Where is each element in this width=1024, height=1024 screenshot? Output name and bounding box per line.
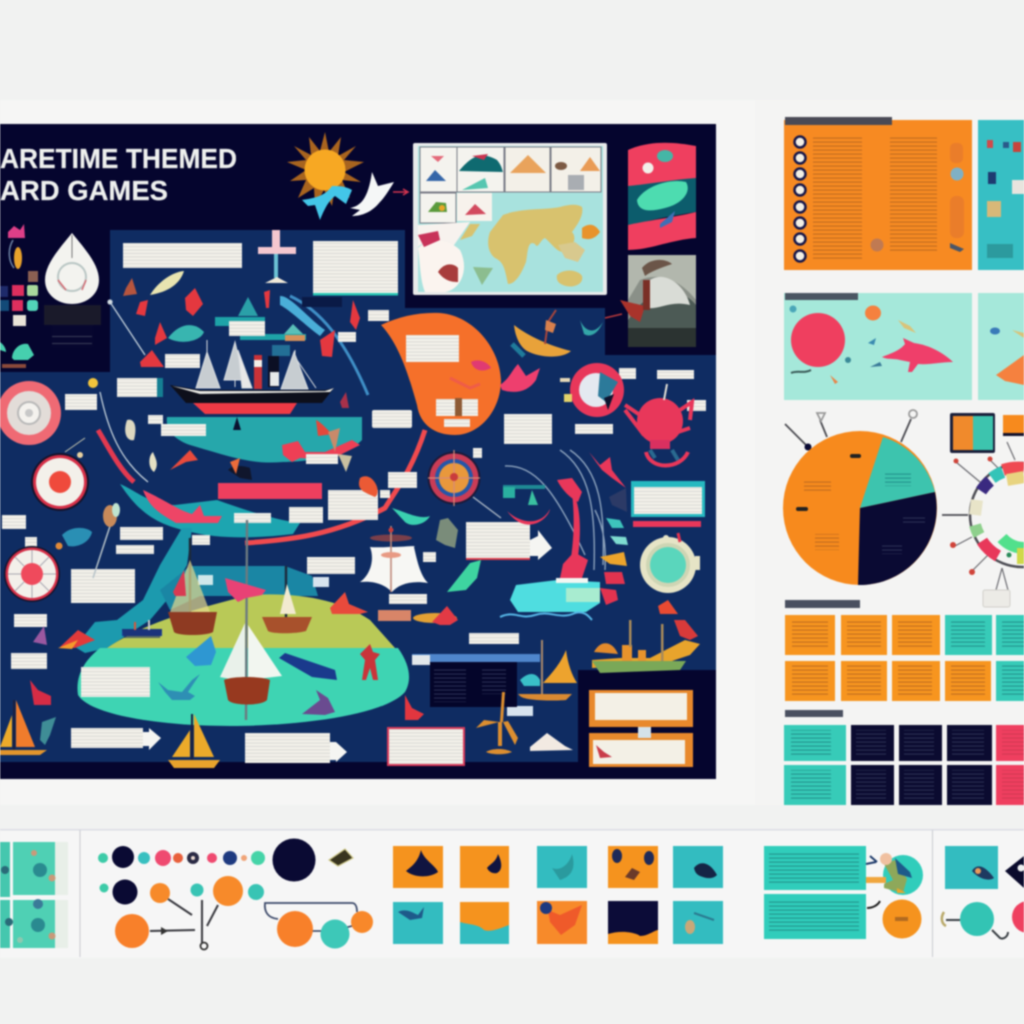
grey route line	[100, 300, 148, 482]
white hill	[530, 733, 573, 751]
small sea creatures	[125, 420, 378, 497]
parrot on teal circle	[866, 853, 923, 895]
wheel chart	[950, 442, 1024, 607]
heading strip	[785, 293, 858, 300]
wheel spokes	[953, 442, 1015, 590]
central text with arrow	[466, 522, 552, 560]
panel: main maritime poster	[0, 124, 716, 779]
ship red keel	[193, 403, 297, 414]
teal swoosh	[75, 528, 192, 653]
pink pink fish	[143, 490, 222, 523]
red curved route left	[98, 430, 134, 482]
poster background	[0, 124, 716, 779]
panel: orange text panel	[784, 117, 972, 270]
panel: red and teal banner	[628, 143, 696, 250]
wheel tag	[983, 590, 1010, 607]
node diagram left	[115, 899, 218, 950]
icon: teal leaf	[392, 508, 430, 525]
title: ARD GAMES	[0, 175, 168, 206]
dark text block	[44, 305, 101, 347]
icon: yellow leaf shadow	[413, 613, 457, 623]
island	[77, 594, 409, 726]
pale leaf icon	[150, 271, 184, 295]
ship hull	[170, 385, 334, 403]
compass wheel	[428, 450, 480, 506]
map side islands	[418, 222, 600, 292]
grey arcs	[505, 450, 605, 570]
icon: sail drop	[45, 233, 99, 304]
yellow boat	[514, 310, 571, 357]
teal bar with hook	[503, 485, 545, 505]
painting: ship in storm	[620, 255, 696, 347]
thumbnails: group two	[537, 846, 723, 944]
sailing steamship	[170, 340, 334, 414]
dark note with blue bar	[412, 654, 540, 707]
thumbnails: group one	[393, 846, 509, 944]
brown ship large	[220, 520, 282, 720]
red connector	[605, 314, 622, 318]
teal tent banner	[215, 297, 306, 341]
pink dolphin	[882, 338, 953, 372]
compass rosette large	[0, 381, 61, 445]
red text box	[387, 727, 465, 766]
icon: whale	[158, 674, 200, 700]
red circle node	[1012, 901, 1024, 933]
open book sail	[360, 526, 428, 592]
icon: ship crew red	[330, 592, 368, 614]
pie pins	[785, 410, 968, 515]
blue ribbon with tail	[280, 296, 325, 336]
orange tab	[1003, 415, 1024, 436]
text labels: top area	[65, 241, 706, 464]
ship cyan	[500, 552, 600, 620]
card grid: teal navy red	[784, 725, 1024, 805]
blue arc route	[290, 296, 368, 395]
orange blob	[865, 306, 881, 320]
ship deck stripe	[172, 386, 334, 394]
red curved route	[245, 430, 425, 543]
red fin arcs	[507, 452, 626, 575]
numbered circles	[794, 136, 806, 262]
title	[0, 143, 237, 206]
icon: white gull	[350, 172, 394, 216]
heading: card group two	[785, 710, 843, 717]
compass rosette red centre	[31, 453, 89, 511]
orange circle with hook	[867, 900, 922, 938]
navy patrol boat	[279, 653, 337, 680]
yellow sailboat	[168, 714, 220, 768]
wheel segments	[975, 468, 1024, 556]
mini screen icon	[950, 413, 995, 453]
arrow to map	[393, 189, 408, 195]
heading: card group one	[785, 600, 860, 608]
yellow cargo ship	[592, 620, 700, 673]
small red sea figures	[123, 278, 360, 408]
sea band	[167, 417, 362, 463]
black diamond icon	[1005, 856, 1024, 888]
panel: left legend	[0, 224, 101, 368]
teal channel	[120, 484, 300, 537]
panel: world map	[413, 143, 607, 295]
icon: red star figure	[360, 644, 380, 680]
map continents	[460, 205, 585, 287]
icon: sun	[287, 132, 364, 206]
red sea shape	[316, 420, 334, 436]
title: ARETIME THEMED	[0, 143, 237, 174]
text columns	[813, 135, 937, 261]
compass rosette lower	[4, 546, 60, 602]
teal figure left	[40, 717, 56, 745]
pie labels	[804, 472, 925, 554]
icon: seahorse figure	[8, 224, 25, 269]
icon: purple seal	[302, 690, 335, 715]
ship funnels	[254, 345, 290, 389]
panel: mint fish panel	[784, 293, 972, 400]
pink mermaid	[500, 364, 540, 392]
panel: mint wedge panel	[978, 293, 1024, 400]
orange region	[381, 313, 501, 435]
arrow label left	[71, 728, 161, 750]
windmill	[476, 692, 518, 754]
icon: red sea star lower	[432, 606, 458, 625]
red sail left	[173, 570, 186, 596]
bottom strip: dot row one	[98, 838, 316, 882]
teal node with hooks	[942, 902, 1008, 939]
teal back patches	[160, 566, 318, 610]
porthole teal	[640, 533, 700, 593]
right text card teal	[631, 481, 705, 527]
teal text panels	[764, 846, 866, 939]
icon: cross mast	[258, 230, 296, 283]
pie chart	[783, 410, 968, 585]
red crab	[625, 384, 692, 466]
icon: blue fish	[186, 636, 216, 666]
red circle	[791, 313, 845, 367]
flag stack	[600, 488, 628, 605]
heading strip	[785, 117, 892, 125]
red sail fish	[225, 578, 266, 602]
ship anchor drop	[233, 417, 241, 430]
bottom strip: pattern thumbnails	[0, 842, 68, 948]
small book icon	[329, 849, 353, 866]
orange sailboat left	[0, 700, 47, 755]
panel: teal icon panel	[978, 120, 1024, 270]
side figures	[870, 143, 964, 252]
teal thumbnail right	[945, 846, 998, 889]
icon: blue gull	[302, 186, 352, 220]
porthole red figure	[560, 363, 624, 417]
connector line	[473, 497, 501, 518]
small blue boat	[122, 620, 162, 638]
icon: teal mounds	[0, 342, 34, 368]
bottom strip: dot row two	[100, 876, 264, 906]
yellow pin	[65, 378, 98, 458]
node diagram right	[265, 903, 373, 948]
white dot on diamond	[1018, 864, 1024, 872]
teal mini wave	[580, 320, 603, 336]
icon: small figures left	[30, 503, 120, 705]
teal swirl icon	[168, 325, 204, 342]
text labels: middle area	[2, 472, 533, 716]
blue dash	[512, 344, 524, 356]
colour swatches	[0, 271, 38, 326]
arrow label centre	[245, 733, 347, 763]
orange framed notes	[589, 690, 693, 767]
map thumbnails	[420, 147, 601, 223]
small sea icons	[790, 306, 916, 384]
red sea star	[282, 440, 360, 462]
orange region decor	[450, 360, 491, 416]
red knots	[658, 600, 698, 640]
icon: green fish	[447, 560, 481, 592]
brown ship right	[262, 566, 312, 633]
icon: colored statue	[436, 518, 458, 548]
brown ship left	[168, 538, 217, 635]
red ribbon	[218, 483, 322, 499]
card grid: orange and teal	[785, 615, 1024, 701]
ship masts	[196, 340, 316, 389]
orange sailboat	[518, 640, 577, 701]
icon: red buoy	[405, 695, 424, 720]
drop detail	[58, 235, 86, 291]
